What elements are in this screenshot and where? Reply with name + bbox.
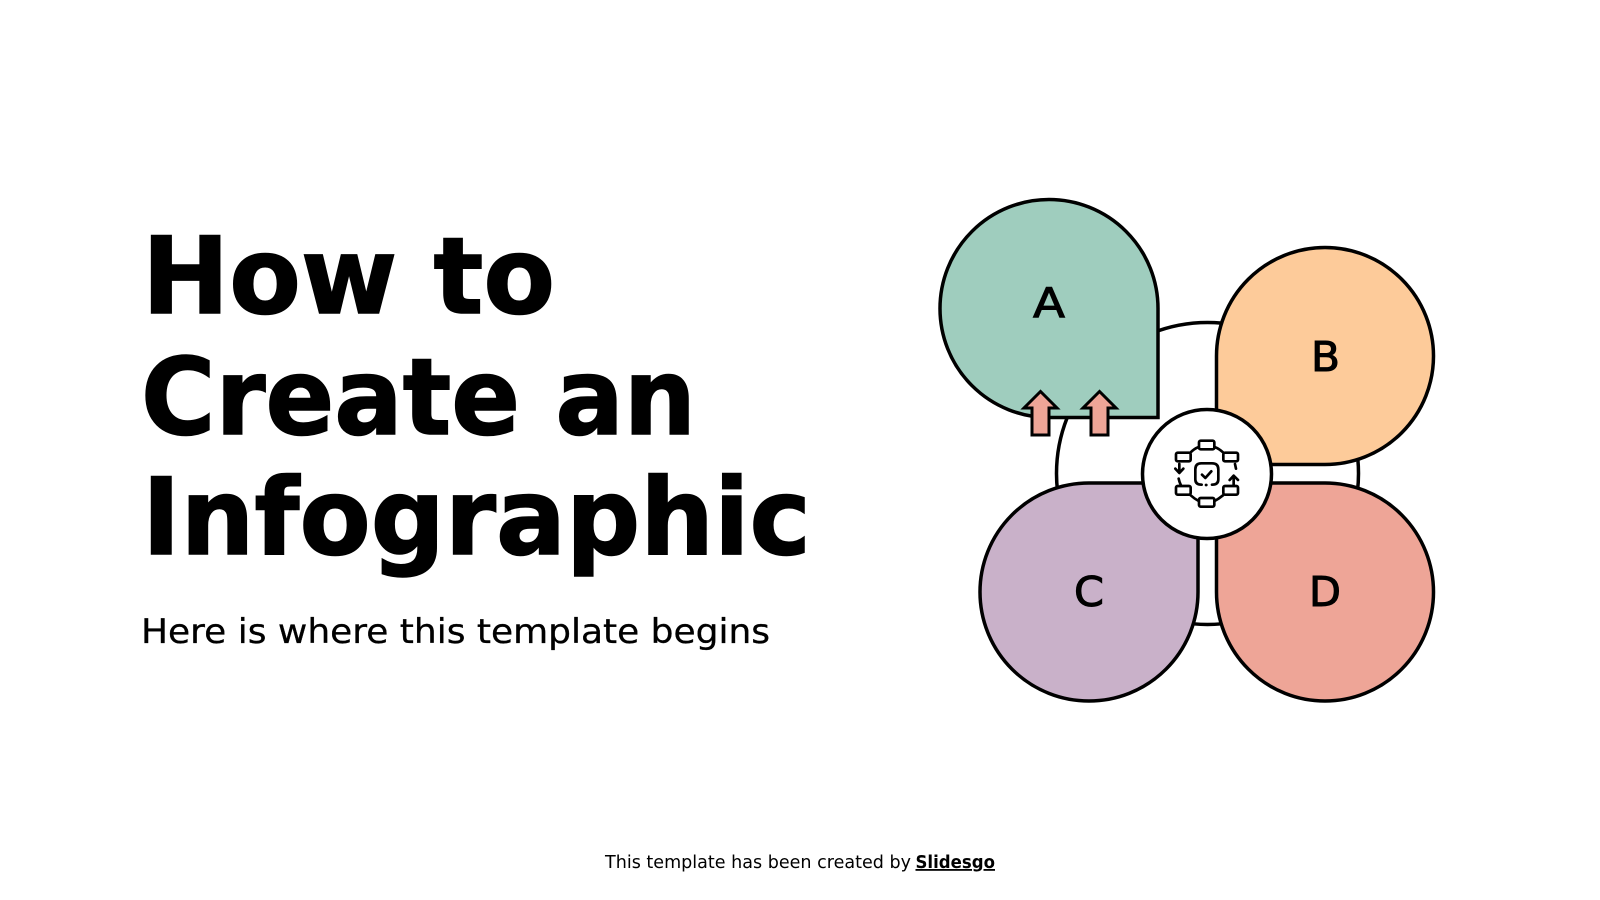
icon: process network with checkmark [1175, 441, 1238, 507]
title: Create an [141, 336, 696, 459]
footer credit: This template has been created by [604, 852, 911, 873]
petal D [1216, 483, 1434, 701]
subtitle: Here is where this template begins [141, 612, 770, 652]
letter D: D [1309, 568, 1341, 616]
arrow right [1083, 392, 1116, 435]
footer credit: Slidesgo [916, 852, 995, 873]
petal B [1216, 248, 1434, 464]
letter C: C [1074, 568, 1104, 616]
letter B: B [1311, 333, 1340, 381]
center circle [1142, 410, 1272, 538]
diagram: four petals [940, 199, 1434, 701]
title: Infographic [142, 456, 811, 579]
arrow left [1024, 392, 1057, 435]
title [141, 215, 811, 579]
petal A [940, 199, 1158, 418]
petal C [980, 483, 1198, 701]
background ring [1056, 322, 1358, 624]
title: How to [142, 215, 555, 338]
letter A: A [1033, 279, 1065, 327]
